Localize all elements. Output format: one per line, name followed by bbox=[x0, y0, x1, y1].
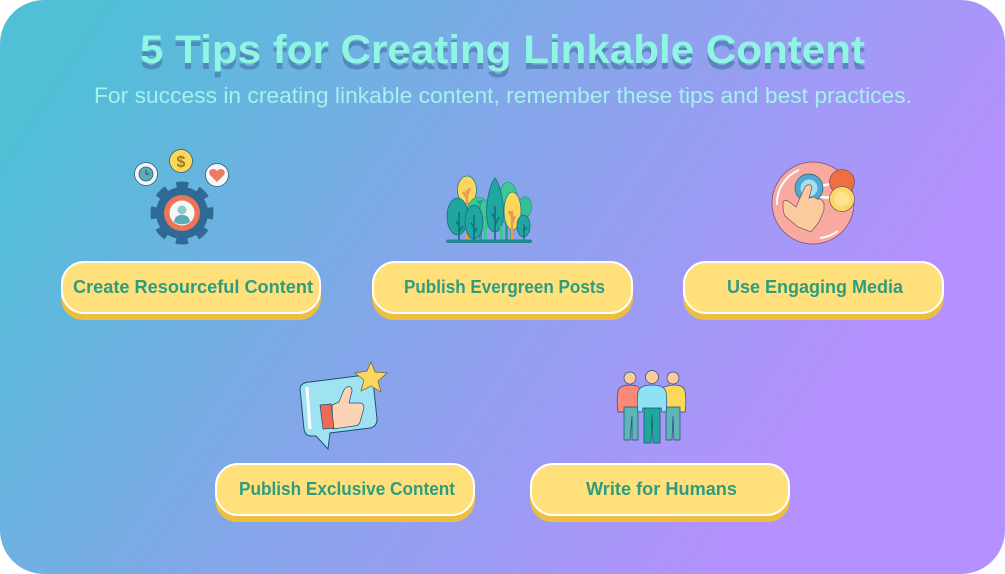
button: create resourceful content bbox=[61, 262, 321, 320]
subtitle: For success in creating linkable content, remember these tips and best practices. bbox=[94, 83, 912, 108]
button: write for humans: Write for Humans bbox=[586, 479, 737, 499]
button: publish exclusive content: Publish Exclusive Content bbox=[239, 479, 455, 499]
button: use engaging media bbox=[683, 262, 944, 320]
button: publish exclusive content bbox=[215, 464, 475, 522]
button: publish evergreen posts: Publish Evergreen Posts bbox=[404, 277, 605, 297]
icon: trees bbox=[446, 176, 532, 243]
icon: gear with person and coins bbox=[134, 150, 228, 242]
icon: touch media bbox=[772, 162, 854, 244]
button: use engaging media: Use Engaging Media bbox=[727, 277, 904, 297]
icon: gear with person and coins: $ bbox=[177, 154, 186, 171]
icon: group of people bbox=[617, 370, 686, 443]
button: create resourceful content: Create Resourceful Content bbox=[73, 277, 313, 297]
title: 5 Tips for Creating Linkable Content bbox=[140, 28, 865, 72]
icon: thumbs up bubble bbox=[300, 362, 387, 449]
title: 5 Tips for Creating Linkable Content bbox=[140, 34, 865, 78]
button: publish evergreen posts bbox=[372, 262, 633, 320]
button: write for humans bbox=[530, 464, 790, 522]
